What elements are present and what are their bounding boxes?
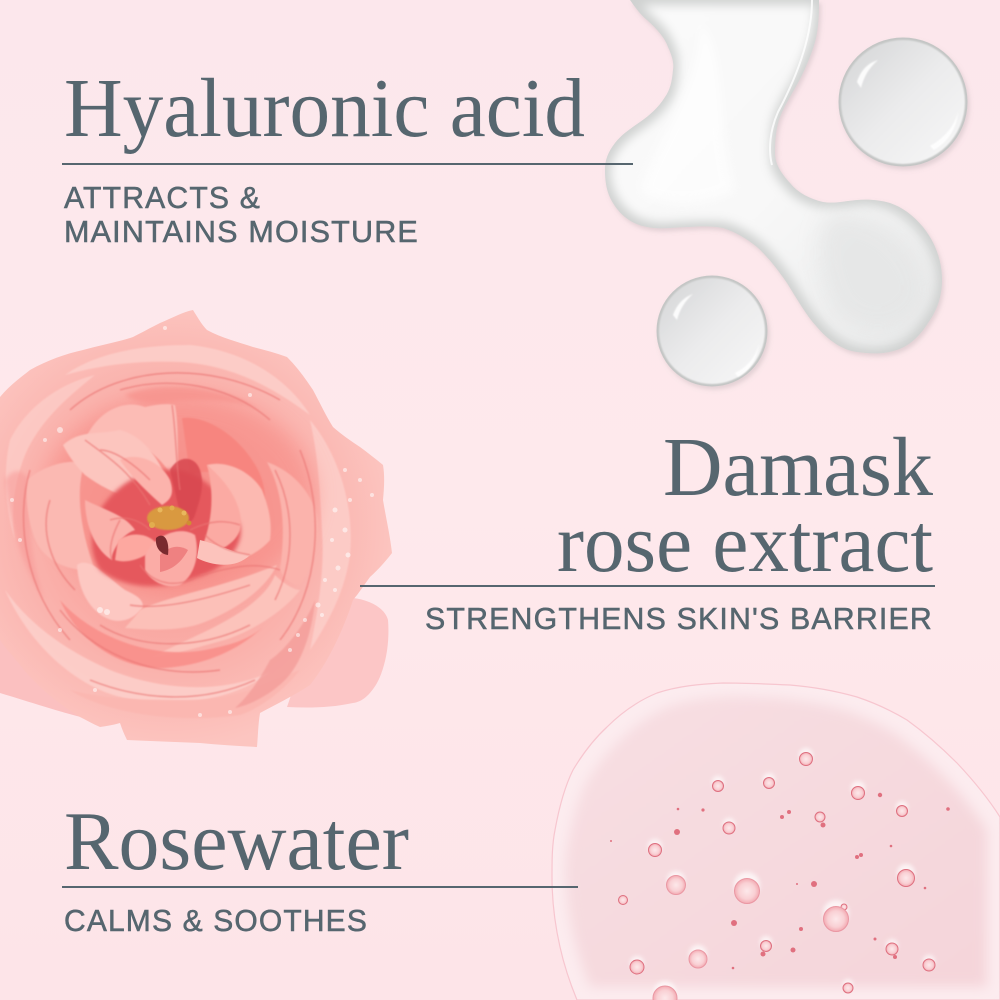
divider: Damask rose extract bbox=[360, 585, 935, 587]
mid petals bbox=[27, 462, 95, 570]
heading: Damask rose extract: Damask bbox=[663, 421, 933, 514]
heading: Rosewater: Rosewater bbox=[64, 795, 409, 888]
illustration: droplet bottom bbox=[656, 276, 768, 386]
divider: Rosewater bbox=[62, 886, 578, 888]
gel body bbox=[605, 0, 942, 353]
text block: Hyaluronic acid benefit: ATTRACTS & bbox=[64, 180, 261, 215]
heading: Damask rose extract bbox=[557, 421, 933, 590]
illustration: rose bbox=[0, 310, 392, 747]
cup shading bbox=[45, 395, 315, 595]
text block: Hyaluronic acid benefit bbox=[64, 180, 419, 249]
inner red zone bbox=[92, 469, 241, 586]
divider: Hyaluronic acid bbox=[62, 163, 633, 165]
text block: Hyaluronic acid benefit: MAINTAINS MOISTURE bbox=[64, 214, 419, 249]
bubble halos bbox=[630, 748, 935, 1000]
pool rim bbox=[552, 683, 1000, 1000]
gel rim and shadow bbox=[605, 0, 942, 353]
outer petal folds bbox=[65, 345, 310, 415]
dark heart bbox=[156, 536, 168, 555]
large pale bubbles bbox=[653, 876, 848, 1000]
illustration: rosewater pool bbox=[552, 683, 1000, 1000]
heading: Hyaluronic acid: Hyaluronic acid bbox=[64, 62, 585, 155]
central frill bbox=[145, 531, 197, 586]
back petals bbox=[287, 598, 388, 708]
stamens bbox=[147, 506, 192, 530]
flower silhouette bbox=[0, 310, 392, 747]
tiny specks bbox=[610, 793, 950, 969]
petal creases bbox=[23, 373, 315, 697]
heading: Damask rose extract: rose extract bbox=[557, 497, 933, 590]
pool body bbox=[552, 683, 1000, 1000]
dew drops bbox=[10, 326, 374, 717]
ringed bubbles bbox=[618, 752, 935, 993]
illustration: hyaluronic acid gel bbox=[605, 0, 942, 353]
text block: Rosewater benefit: CALMS & SOOTHES bbox=[64, 903, 368, 938]
text block: Damask rose benefit: STRENGTHENS SKIN'S BARRIER bbox=[425, 601, 933, 636]
illustration: droplet right bbox=[838, 38, 968, 166]
